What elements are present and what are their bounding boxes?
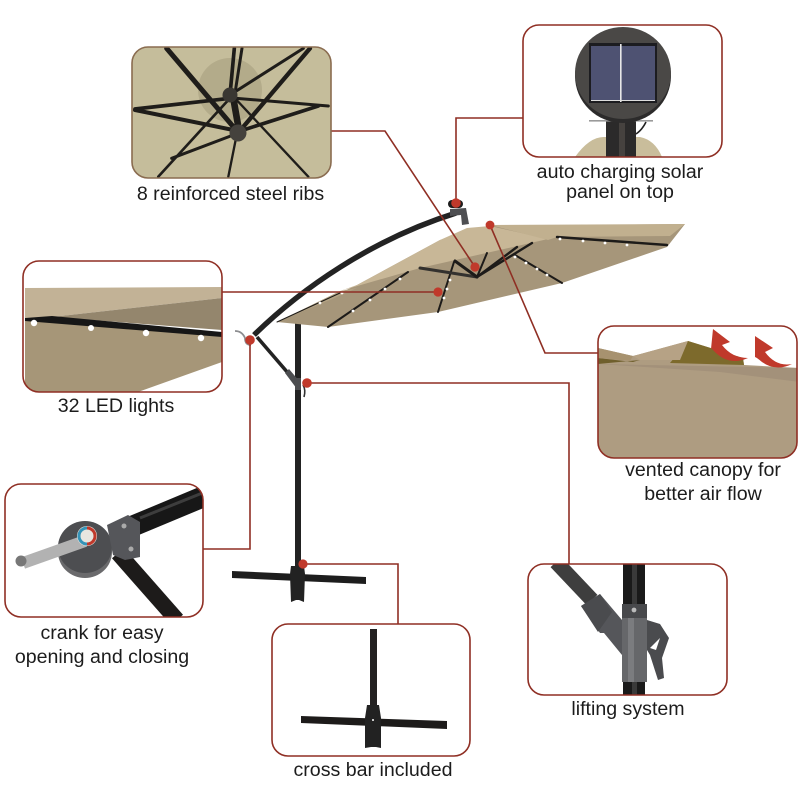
panel: LED lights	[23, 261, 222, 392]
icon: canopy top	[277, 224, 685, 322]
caption: steel ribs: 8 reinforced steel ribs	[137, 183, 324, 205]
caption: crank: crank for easy	[40, 622, 164, 644]
connector: crank	[203, 340, 250, 549]
connector: vented canopy	[490, 225, 598, 353]
caption: vented canopy: better air flow	[644, 483, 763, 505]
connector: LED lights	[222, 291, 438, 293]
panel border	[528, 564, 727, 695]
photo: LED strip close-up	[25, 287, 222, 392]
caption: vented canopy: vented canopy for	[625, 459, 781, 481]
panel border	[132, 47, 331, 178]
photo: canopy vent	[598, 341, 800, 460]
panel border	[598, 326, 797, 458]
photo: ribs under canopy	[132, 47, 331, 178]
umbrella product illustration	[232, 200, 685, 602]
marker dots	[245, 198, 494, 569]
caption: vented canopy	[625, 459, 781, 505]
icon: curved arm	[254, 213, 456, 335]
icon: top bracket	[448, 200, 469, 225]
icon: air flow arrow 1	[711, 329, 748, 361]
icon: LED dots on canopy	[319, 238, 628, 312]
connector: steel ribs	[331, 131, 475, 267]
icon: crank hook	[235, 331, 251, 345]
caption: lifting system: lifting system	[571, 698, 685, 720]
icon: canopy underside	[277, 224, 685, 327]
panel border	[272, 624, 470, 756]
connector: cross bar	[303, 564, 398, 624]
panel: lifting system	[528, 560, 727, 700]
caption: cross bar: cross bar included	[293, 759, 453, 781]
photo: solar panel cap	[575, 27, 671, 160]
connector: solar panel	[456, 118, 523, 203]
panel: steel ribs	[132, 47, 331, 178]
icon: arm strut	[257, 337, 288, 373]
caption: solar: panel on top	[566, 181, 674, 203]
caption: LED: 32 LED lights	[58, 395, 174, 417]
photo: cross bar base	[301, 629, 447, 748]
caption: solar	[537, 161, 704, 203]
caption: solar: auto charging solar	[537, 161, 704, 183]
panel: cross bar	[272, 624, 470, 756]
panel: vented canopy	[598, 326, 800, 460]
icon: main pole	[295, 322, 301, 567]
connector: lifting system	[307, 383, 569, 564]
photo: lifting mechanism	[556, 560, 669, 700]
panel border	[23, 261, 222, 392]
photo: crank handle	[16, 492, 205, 620]
caption: crank: opening and closing	[15, 646, 189, 668]
icon: lift collar	[285, 369, 305, 397]
panel: crank	[5, 484, 205, 620]
caption: crank	[15, 622, 189, 668]
icon: canopy ribs	[277, 237, 667, 327]
icon: cross base	[232, 566, 366, 602]
panel border	[523, 25, 722, 157]
panel: solar	[523, 25, 722, 160]
panel border	[5, 484, 203, 617]
icon: air flow arrow 2	[755, 336, 792, 368]
